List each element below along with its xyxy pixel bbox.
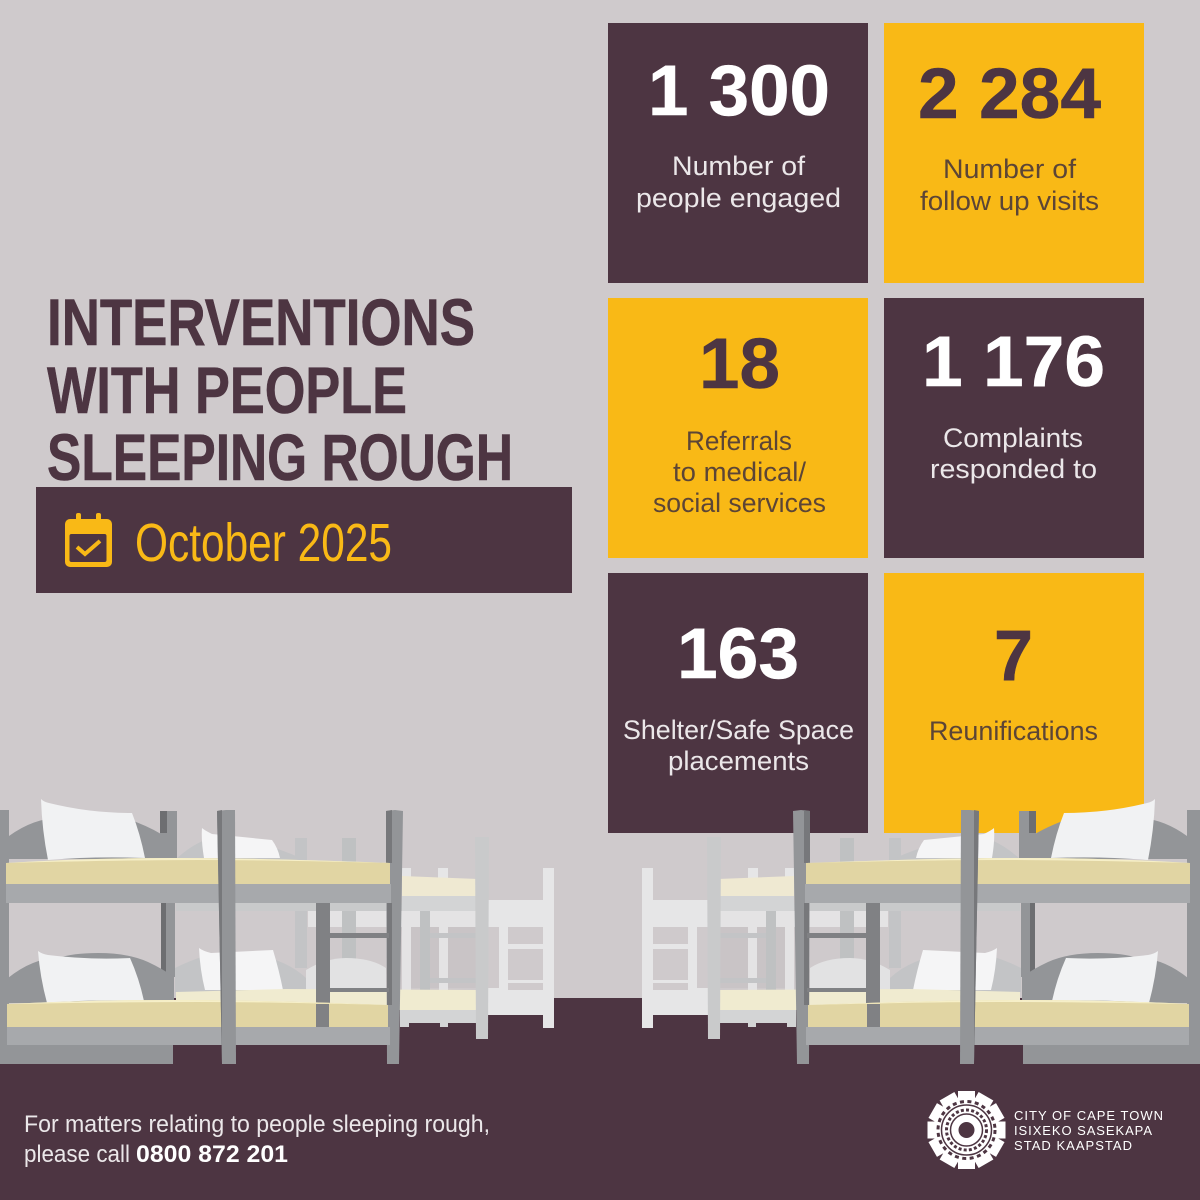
upper mattress bbox=[6, 858, 390, 884]
title: WITH PEOPLE bbox=[47, 353, 407, 427]
panel: shelter placements: 163 bbox=[677, 615, 799, 694]
title: SLEEPING ROUGH bbox=[47, 420, 513, 494]
front post bbox=[960, 810, 979, 1064]
panel: complaints: responded to bbox=[930, 454, 1097, 484]
logo text: CITY OF CAPE TOWN bbox=[1014, 1108, 1163, 1123]
panel: follow up visits: follow up visits bbox=[920, 186, 1099, 216]
bunk beds: left group bbox=[0, 799, 554, 1064]
panel: referrals: to medical/ bbox=[673, 457, 807, 487]
panel: complaints bbox=[884, 298, 1144, 558]
panel: follow up visits: 2 284 bbox=[918, 55, 1102, 134]
contact text: For matters relating to people sleeping rough, bbox=[24, 1111, 490, 1138]
panel: referrals: social services bbox=[653, 488, 826, 518]
panel: shelter placements: placements bbox=[668, 746, 809, 776]
footer band bbox=[0, 1064, 1200, 1200]
front bed bbox=[0, 799, 403, 1064]
panel: people engaged: people engaged bbox=[636, 183, 841, 213]
middle bed bbox=[707, 828, 1021, 1039]
rear bed bbox=[308, 868, 554, 1028]
panel: people engaged: 1 300 bbox=[648, 52, 830, 131]
upper mattress bbox=[806, 858, 1190, 884]
title: INTERVENTIONS bbox=[47, 285, 475, 359]
panel: referrals: 18 bbox=[699, 325, 780, 404]
ladder bbox=[807, 903, 880, 1028]
panel: follow up visits: Number of bbox=[943, 154, 1077, 184]
floor bbox=[173, 998, 1023, 1068]
far-side post bbox=[793, 810, 810, 1064]
middle bed bbox=[175, 828, 489, 1039]
pillow bbox=[916, 828, 994, 858]
date banner bbox=[36, 487, 572, 593]
pillow bbox=[1051, 799, 1155, 860]
date text: October 2025 bbox=[135, 513, 392, 573]
logo text: ISIXEKO SASEKAPA bbox=[1014, 1123, 1152, 1138]
front bed bbox=[793, 799, 1200, 1064]
bunk beds: right group bbox=[642, 799, 1200, 1064]
contact text bbox=[24, 1111, 490, 1168]
pillow bbox=[199, 948, 283, 990]
panel: follow up visits bbox=[884, 23, 1144, 283]
panel: people engaged: Number of bbox=[672, 151, 806, 181]
panel: people engaged bbox=[608, 23, 868, 283]
pillow bbox=[913, 948, 997, 990]
panel: reunifications: 7 bbox=[994, 617, 1033, 696]
pillow bbox=[41, 799, 145, 860]
pillow bbox=[38, 951, 144, 1003]
panel: reunifications bbox=[884, 573, 1144, 833]
panel: shelter placements bbox=[608, 573, 868, 833]
panel: referrals: Referrals bbox=[686, 426, 792, 456]
panel: referrals bbox=[608, 298, 868, 558]
title bbox=[47, 285, 513, 494]
panel: complaints: 1 176 bbox=[922, 323, 1105, 402]
lower mattress bbox=[7, 1000, 388, 1027]
rear bed bbox=[642, 868, 888, 1028]
front post bbox=[217, 810, 236, 1064]
far-side post bbox=[386, 810, 403, 1064]
icon: calendar with check bbox=[65, 513, 112, 567]
panel: shelter placements: Shelter/Safe Space bbox=[623, 715, 854, 745]
panel: complaints: Complaints bbox=[943, 423, 1083, 453]
pillow bbox=[202, 828, 280, 858]
pillow bbox=[1052, 951, 1158, 1003]
contact text: 0800 872 201 bbox=[136, 1141, 288, 1168]
contact text: please call bbox=[24, 1141, 130, 1168]
logo: city emblem bbox=[928, 1091, 1006, 1169]
ladder bbox=[316, 903, 389, 1028]
panel: reunifications: Reunifications bbox=[929, 716, 1098, 746]
lower mattress bbox=[808, 1000, 1189, 1027]
logo text bbox=[1014, 1108, 1163, 1153]
logo text: STAD KAAPSTAD bbox=[1014, 1138, 1132, 1153]
